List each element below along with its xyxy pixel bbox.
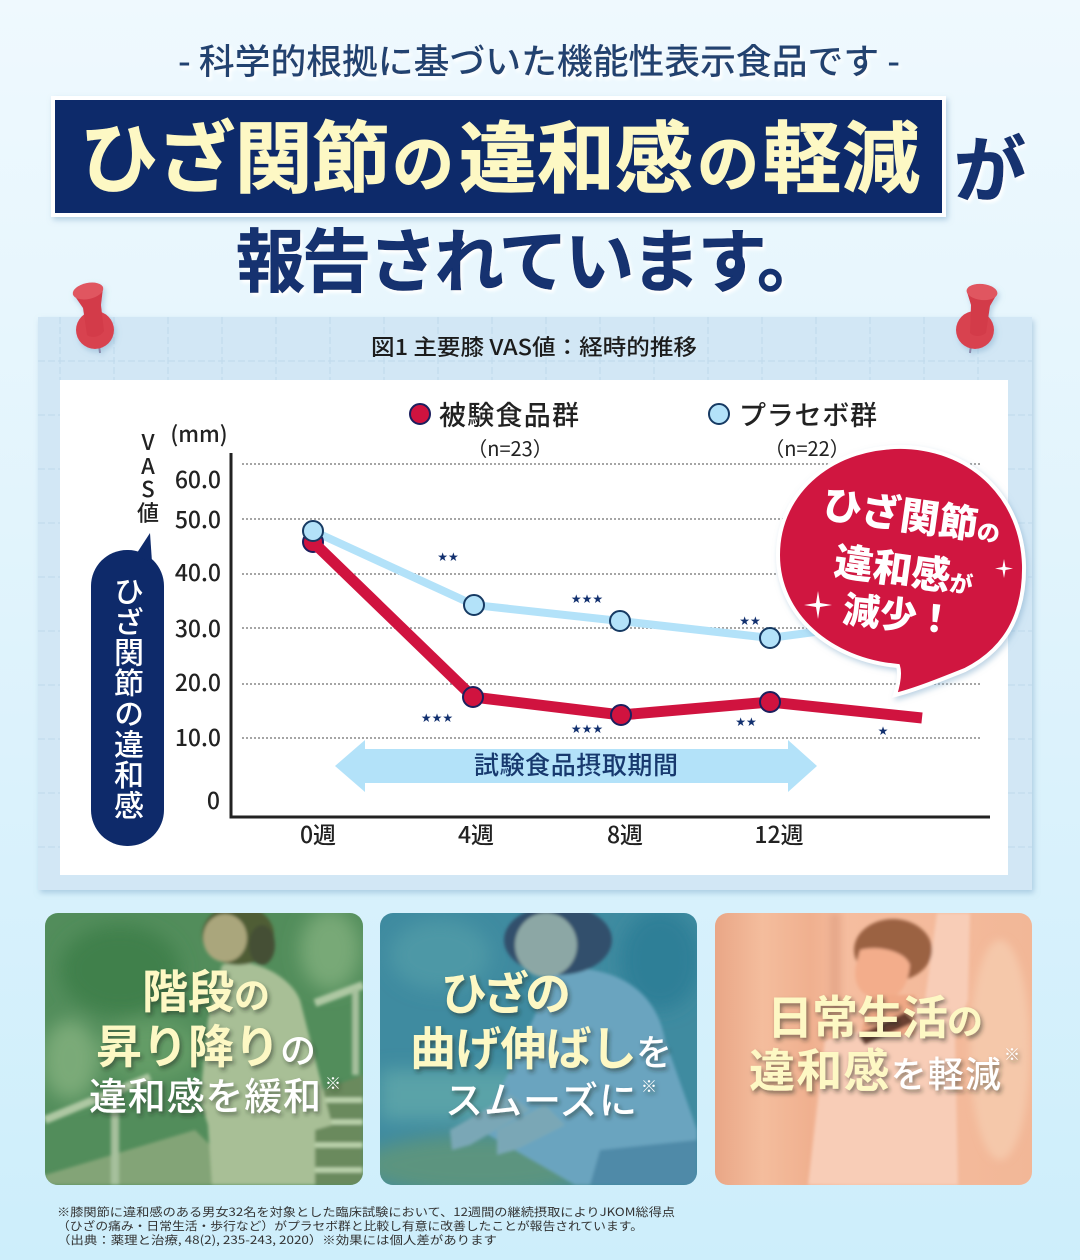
headline text: の — [697, 114, 759, 204]
legend: placebo group: （n=22） — [764, 433, 850, 462]
y axis tick labels: 30.0 — [175, 610, 221, 644]
x axis labels: 8週 — [607, 816, 643, 850]
y axis title: A — [141, 449, 155, 481]
card text: ひざの — [441, 958, 571, 1024]
sparkles — [804, 559, 1013, 619]
card text: ※ — [325, 1070, 341, 1094]
y axis tick labels: 60.0 — [175, 461, 221, 495]
card text: 日常生活の — [767, 982, 983, 1048]
subtitle: - 科学的根拠に基づいた機能性表示食品です - — [178, 34, 900, 85]
headline text: 軽減 — [763, 97, 920, 209]
card text: ※ — [1004, 1041, 1020, 1065]
y axis tick labels: 20.0 — [175, 664, 221, 698]
significance stars: ★★ — [735, 715, 757, 729]
legend: test group: 被験食品群 — [439, 394, 579, 433]
significance stars: ★★★ — [571, 592, 603, 606]
card text — [749, 982, 1020, 1101]
y axis tick labels — [175, 461, 221, 816]
bubble text: 違和感が — [831, 531, 977, 606]
placebo line — [303, 531, 830, 638]
headline second line: 報告されています。 — [236, 206, 826, 306]
panel: knee bend card — [380, 913, 697, 1185]
chart title: 図1 主要膝 VAS値：経時的推移 — [371, 330, 697, 362]
callout bubble — [778, 447, 1024, 695]
legend: placebo group — [709, 394, 877, 462]
pushpin left — [71, 280, 114, 353]
intake period arrow: 試験食品摂取期間 — [474, 746, 678, 782]
y axis title — [137, 425, 159, 528]
headline banner — [53, 97, 944, 215]
y axis title: 値 — [137, 496, 159, 528]
legend: test group — [410, 394, 579, 462]
y axis callout: ひざ関節の違和感 — [107, 576, 151, 821]
card text: 曲げ伸ばしを — [410, 1013, 672, 1079]
card text: ※ — [641, 1073, 657, 1097]
card text: 昇り降りの — [96, 1011, 316, 1077]
headline particle: が — [954, 112, 1026, 217]
footnote — [57, 1204, 675, 1248]
card text: 違和感を軽減 — [749, 1035, 1001, 1101]
test group line — [313, 542, 922, 725]
y axis tick labels: 10.0 — [175, 719, 221, 753]
bubble text: 減少！ — [841, 579, 957, 645]
x axis labels: 12週 — [754, 816, 804, 850]
y axis title: S — [141, 472, 155, 504]
y axis title: V — [140, 425, 155, 457]
footnote: （出典：薬理と治療, 48(2), 235-243, 2020）※効果には個人差があります — [57, 1232, 497, 1248]
bubble text: ひざ関節の — [820, 474, 1005, 554]
y axis tick labels: 0 — [207, 782, 220, 816]
line chart — [231, 453, 990, 817]
pushpin right — [956, 282, 998, 353]
intake period arrow — [335, 740, 817, 792]
significance stars: ★ — [878, 724, 888, 738]
footnote: ※膝関節に違和感のある男女32名を対象とした臨床試験において、12週間の継続摂取によりJKOM総得点 — [57, 1204, 675, 1220]
card text: 違和感を緩和 — [89, 1066, 321, 1121]
y axis tick labels: 40.0 — [175, 554, 221, 588]
y axis tick labels: 50.0 — [175, 501, 221, 535]
headline text: の — [392, 114, 454, 204]
placebo markers — [303, 521, 780, 648]
significance stars: ★★ — [437, 550, 459, 564]
headline text: 違和感 — [459, 97, 693, 209]
legend: test group: （n=23） — [467, 433, 553, 462]
card text: 階段の — [142, 956, 270, 1022]
x axis labels: 0週 — [300, 816, 336, 850]
x axis labels: 4週 — [458, 816, 494, 850]
panel: stairs card — [42, 905, 363, 1185]
x axis labels — [300, 816, 804, 850]
card text: スムーズに — [445, 1070, 637, 1125]
significance stars: ★★★ — [421, 711, 453, 725]
significance stars: ★★★ — [571, 722, 603, 736]
panel: daily life card — [715, 913, 1032, 1185]
y axis callout — [91, 533, 164, 846]
significance stars: ★★ — [739, 614, 761, 628]
significance stars — [421, 550, 888, 738]
bubble text — [820, 474, 1005, 645]
headline text: ひざ関節 — [80, 97, 390, 209]
footnote: （ひざの痛み・日常生活・歩行など）がプラセボ群と比較し有意に改善したことが報告されています。 — [57, 1218, 643, 1234]
legend: placebo group: プラセボ群 — [739, 394, 877, 433]
card text — [410, 958, 672, 1125]
y axis unit: (mm) — [170, 417, 228, 449]
card text — [89, 956, 341, 1121]
panel: chart board — [38, 317, 1032, 890]
